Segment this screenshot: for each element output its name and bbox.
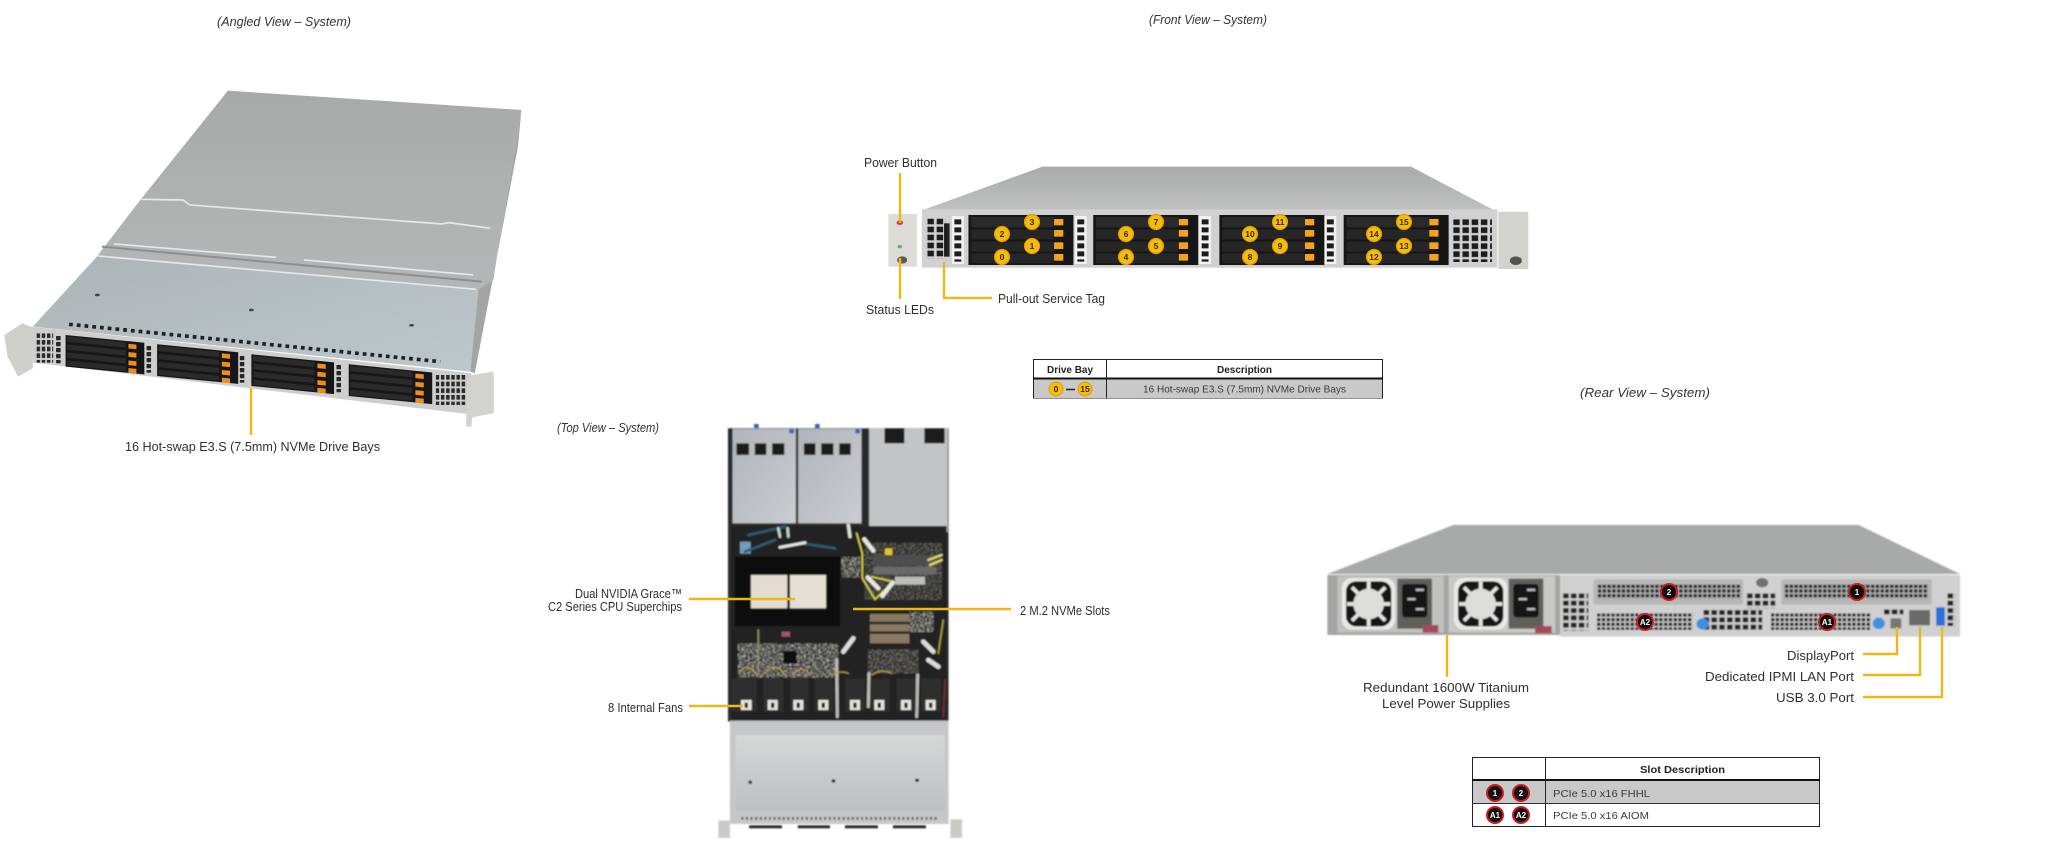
drive bay number badges: 8 [1248, 252, 1253, 262]
slot number badges: 2 [1667, 588, 1672, 597]
label: M.2: 2 M.2 NVMe Slots [1020, 603, 1110, 618]
drive bay number badges: 15 [1399, 217, 1409, 227]
drive blocks [66, 335, 144, 374]
label: IPMI LAN: Dedicated IPMI LAN Port [1705, 669, 1854, 684]
right grille [1453, 219, 1492, 262]
table header: slot description: Slot Description [1640, 764, 1725, 776]
label: USB: USB 3.0 Port [1776, 690, 1854, 705]
psu body [1327, 575, 1560, 635]
row badges [1487, 785, 1529, 823]
drive bay number badges: 9 [1278, 241, 1283, 251]
callout line: DisplayPort [1863, 627, 1897, 654]
label: drive bays: 16 Hot-swap E3.S (7.5mm) NVMe Drive Bays [125, 439, 380, 454]
drive bay number badges: 3 [1030, 217, 1035, 227]
drive bay number badges: 0 [1000, 252, 1005, 262]
blue thumb screws [1697, 618, 1885, 630]
drive bay number badges: 2 [1000, 229, 1005, 239]
board base [732, 526, 947, 720]
PSU inlets [1397, 579, 1432, 629]
label: CPU: Dual NVIDIA Grace™ [575, 586, 682, 601]
M.2 slots [870, 614, 909, 643]
left rack ear [4, 323, 33, 377]
lid [923, 167, 1494, 210]
caption: front view: (Front View – System) [1149, 13, 1267, 27]
left ear [888, 214, 917, 267]
front latches [749, 825, 926, 828]
slot number badges: A2 [1640, 618, 1651, 627]
caption: angled view: (Angled View – System) [217, 15, 351, 29]
label: service tag: Pull-out Service Tag [998, 291, 1105, 306]
ear knobs and LEDs [897, 220, 1522, 265]
front face [922, 209, 1497, 268]
panel: rear view server illustration [1327, 525, 1960, 637]
riser components [740, 542, 937, 664]
panel: angled view server illustration [4, 91, 521, 427]
left grille [927, 219, 946, 259]
callout line: pull-out service tag [944, 262, 992, 298]
right ear [1498, 212, 1528, 269]
table: slot description [1472, 757, 1820, 827]
drive bay number badges: 12 [1369, 252, 1379, 262]
centre knob [1756, 578, 1768, 587]
row badges: 1 [1493, 789, 1498, 798]
row badges: 2 [1519, 789, 1524, 798]
vent row [741, 814, 937, 822]
panel: front view server illustration [888, 167, 1528, 269]
PSU shroud left [733, 429, 796, 523]
slot number badges [1637, 584, 1865, 630]
drive bay number badges: 10 [1245, 229, 1255, 239]
rear chassis body [1327, 525, 1960, 637]
drive bay number badges: 6 [1124, 229, 1129, 239]
mid and left vents [1563, 593, 1955, 631]
LAN port [1909, 610, 1930, 625]
fans [732, 678, 941, 712]
badges 0 to 15: 0 [1054, 384, 1059, 394]
right grille [436, 375, 466, 405]
table: drive bay description [1033, 359, 1383, 398]
table row description: 16 Hot-swap E3.S (7.5mm) NVMe Drive Bays [1143, 384, 1346, 396]
rack ears [718, 819, 962, 838]
row badges: A1 [1490, 811, 1501, 820]
cables [740, 525, 945, 717]
PSU shroud centre [798, 429, 861, 523]
drive bay number badges: 14 [1369, 229, 1379, 239]
side edge [470, 110, 521, 373]
callout line: CPU [689, 598, 795, 600]
upper section: shrouds and tray [718, 424, 962, 838]
power supplies [1337, 576, 1555, 633]
PSU faces [1337, 576, 1444, 633]
drive bay number badges [994, 214, 1412, 264]
label: DisplayPort: DisplayPort [1787, 648, 1854, 663]
drive bay number badges: 5 [1154, 241, 1159, 251]
PSU handles [1423, 625, 1552, 633]
CPU plate [735, 557, 840, 626]
IO panel [1560, 575, 1960, 637]
top slots [1593, 579, 1932, 605]
CPU superchip right [790, 575, 826, 608]
callout line: status LEDs [899, 258, 901, 299]
drive bay number badges: 7 [1154, 217, 1159, 227]
vent dashes [69, 324, 440, 362]
right rack ear [466, 372, 494, 427]
riser unit right [869, 428, 948, 532]
lid screws [95, 294, 414, 327]
shroud vents [736, 428, 945, 455]
USB port [1936, 607, 1945, 626]
lid [1327, 525, 1960, 574]
fan labels [741, 700, 936, 710]
chassis [728, 428, 949, 722]
lid seam lines [97, 199, 490, 289]
PSU fans [1342, 578, 1395, 630]
front face [31, 327, 471, 414]
callout line: fans [689, 705, 743, 707]
label: CPU second line: C2 Series CPU Superchips [548, 599, 682, 614]
row badges: A2 [1516, 811, 1527, 820]
CPU superchip left [751, 575, 787, 608]
seam shadow [102, 247, 482, 282]
badges 0 to 15 [1049, 382, 1092, 396]
display port [1890, 618, 1901, 628]
service tag slot [944, 223, 950, 257]
label: fans: 8 Internal Fans [608, 700, 683, 715]
drive bay number badges: 11 [1276, 217, 1285, 227]
motherboard section [732, 525, 947, 720]
row text: AIOM: PCIe 5.0 x16 AIOM [1553, 810, 1649, 822]
label: status LEDs: Status LEDs [866, 302, 934, 317]
divider grilles [952, 216, 1336, 264]
callout line: M.2 slots [853, 608, 1011, 610]
fan label arrows [745, 703, 932, 708]
table header: drive bay: Drive Bay [1047, 364, 1093, 376]
label: power supplies line 1: Redundant 1600W Titanium [1363, 680, 1529, 695]
divider grilles [58, 336, 339, 392]
label: power button: Power Button [864, 155, 937, 170]
drive bay number badges: 4 [1124, 252, 1129, 262]
callout line: power button [899, 173, 901, 223]
slot number badges: 1 [1855, 588, 1860, 597]
table header: description: Description [1217, 364, 1272, 376]
tray screws [748, 779, 919, 784]
slot number badges: A1 [1822, 618, 1833, 627]
rear lid [97, 91, 521, 292]
callout line: USB [1863, 627, 1942, 697]
callout line: IPMI LAN [1863, 627, 1920, 675]
drive blocks [968, 215, 1073, 265]
drive bay number badges: 1 [1030, 241, 1035, 251]
row text: FHHL: PCIe 5.0 x16 FHHL [1553, 788, 1650, 800]
front tray [730, 721, 949, 824]
mottled components [738, 543, 942, 677]
callout line: power supplies [1446, 635, 1448, 677]
front lid [33, 255, 478, 372]
blue tabs [754, 424, 860, 433]
caption: top view: (Top View – System) [557, 421, 659, 435]
caption: rear view: (Rear View – System) [1580, 386, 1710, 400]
badges 0 to 15: 15 [1080, 384, 1090, 394]
left grille [37, 333, 53, 363]
panel: top view server illustration [718, 424, 962, 838]
label: power supplies line 2: Level Power Supplies [1382, 696, 1510, 711]
callout line: drive bays [250, 388, 252, 435]
drive bay number badges: 13 [1399, 241, 1409, 251]
